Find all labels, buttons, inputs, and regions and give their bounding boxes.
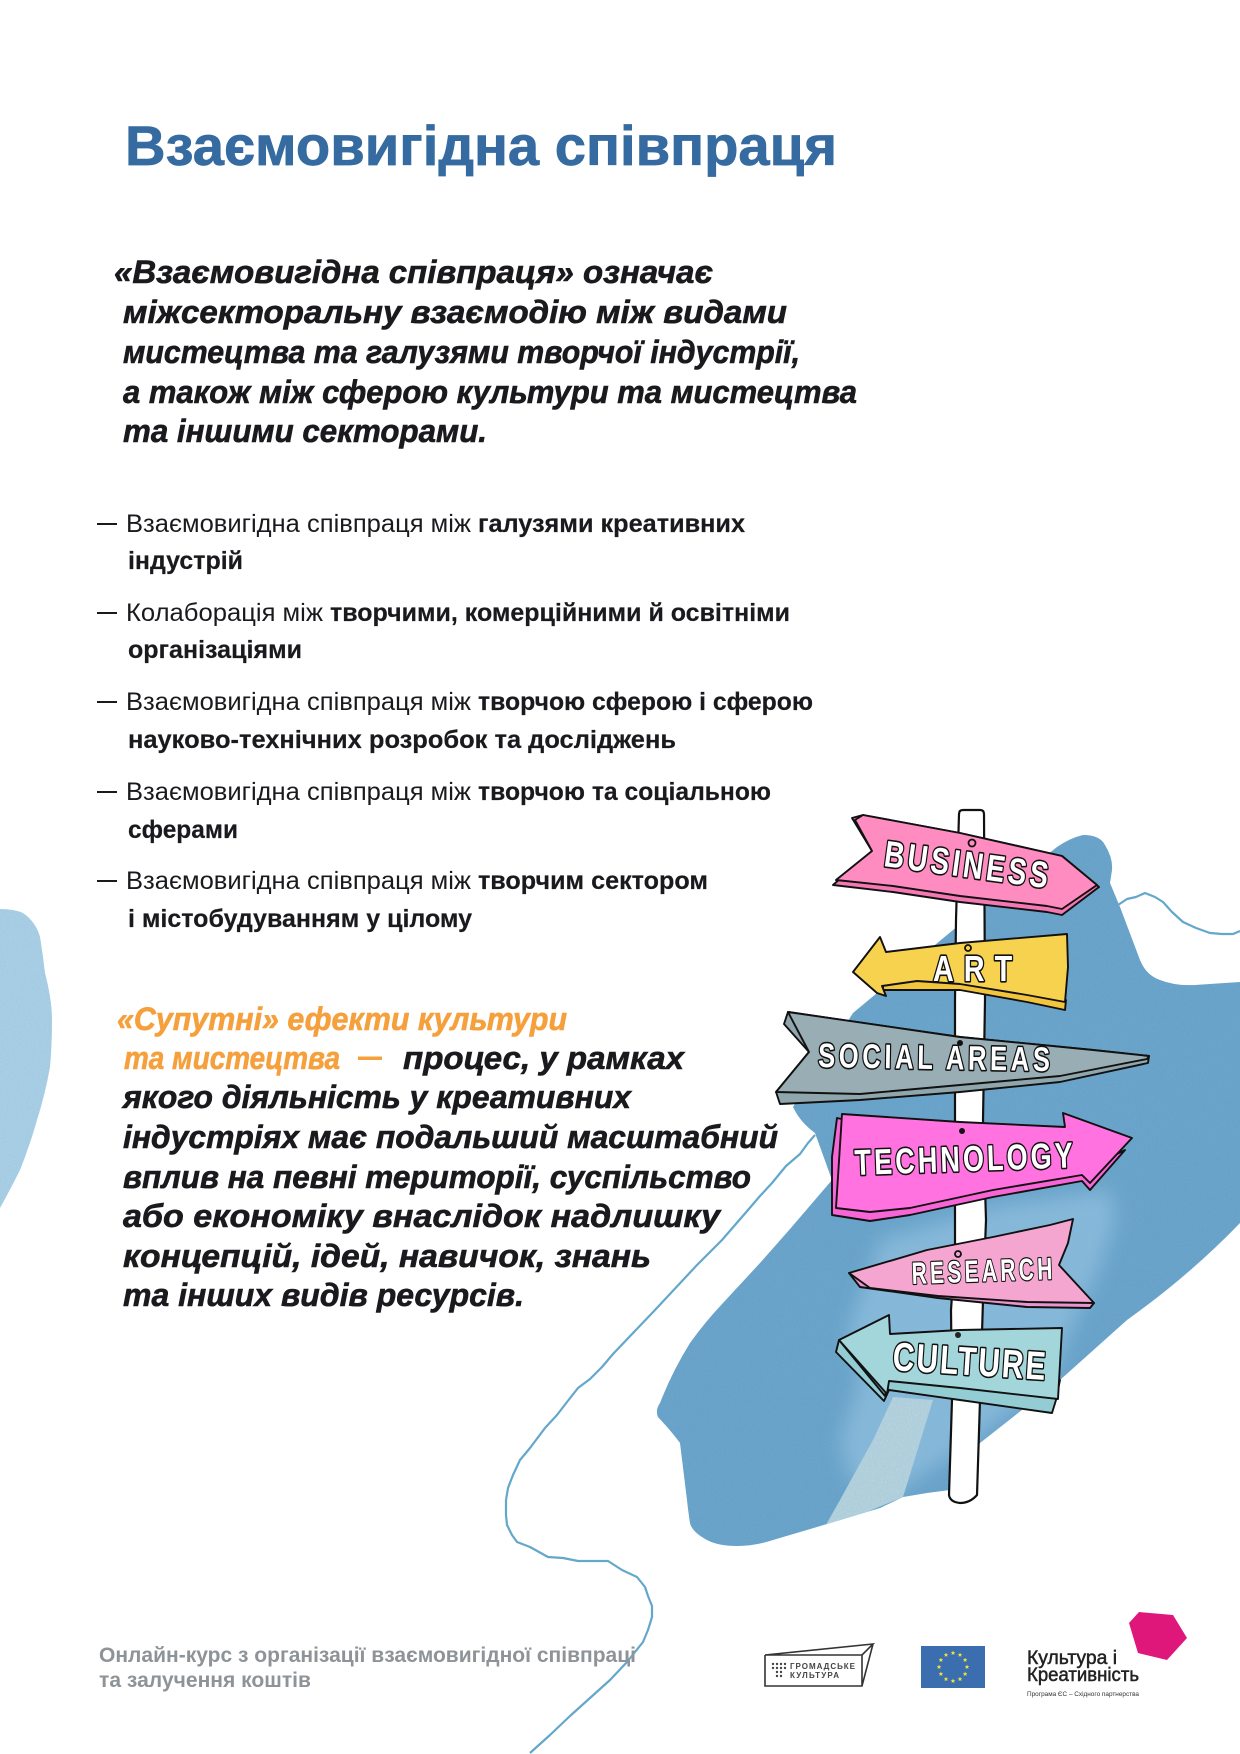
sign: art (853, 934, 1068, 1010)
logo: Culture and Creativity (1027, 1612, 1187, 1698)
list item 5: творчим сектором (478, 867, 708, 895)
spillover effects paragraph: індустріях має подальший масштабний (123, 1119, 778, 1155)
logo: Hromadske Kultura (765, 1644, 873, 1686)
spillover effects paragraph: та інших видів ресурсів. (123, 1277, 524, 1313)
spillover effects paragraph: «Супутні» ефекти культури (117, 1001, 567, 1037)
logo: Hromadske Kultura: КУЛЬТУРА (790, 1671, 839, 1680)
list item 1: Взаємовигідна співпраця між (126, 510, 471, 538)
sign: social areas: SOCIAL AREAS (818, 1038, 1050, 1079)
list item 4: творчою та соціальною (478, 778, 771, 806)
sign: research: RESEARCH (911, 1251, 1053, 1291)
intro paragraph: «Взаємовигідна співпраця» означає (114, 254, 713, 290)
list item 5 (97, 867, 708, 933)
logo: Culture and Creativity: Креативність (1027, 1665, 1139, 1686)
logo: Culture and Creativity: Культура і (1027, 1648, 1117, 1669)
intro paragraph: а також між сферою культури та мистецтва (123, 374, 857, 410)
list item 1: індустрій (128, 547, 243, 575)
list item 3 (97, 688, 813, 754)
list item 1 (97, 510, 745, 575)
logo: EU flag (921, 1646, 985, 1688)
post (949, 810, 986, 1503)
sign: culture: CULTURE (891, 1335, 1047, 1389)
list item 4 (97, 778, 771, 844)
intro paragraph: мистецтва та галузями творчої індустрії, (123, 334, 800, 370)
sign: research (849, 1219, 1094, 1308)
background watercolor blob: right (650, 830, 1240, 1550)
intro paragraph (114, 254, 857, 449)
sign: social areas (776, 1012, 1149, 1104)
list item 4: сферами (128, 816, 238, 844)
footer course label: та залучення коштів (99, 1669, 311, 1692)
list item 1: галузями креативних (478, 510, 745, 538)
spillover effects paragraph: концепцій, ідей, навичок, знань (123, 1238, 651, 1274)
sign: technology (832, 1113, 1132, 1221)
list of collaboration types (97, 510, 813, 933)
footer course label: Онлайн-курс з організації взаємовигідної співпраці (99, 1644, 636, 1667)
intro paragraph: міжсекторальну взаємодію між видами (123, 294, 787, 330)
title: Взаємовигідна співпраця (125, 114, 837, 177)
list item 2 (97, 599, 790, 664)
sign: technology: TECHNOLOGY (854, 1135, 1073, 1183)
list item 4: Взаємовигідна співпраця між (126, 778, 471, 806)
spillover effects paragraph: та мистецтва (124, 1040, 340, 1076)
footer course label (99, 1644, 636, 1692)
intro paragraph: та іншими секторами. (123, 413, 487, 449)
signpost illustration (776, 810, 1149, 1503)
list item 5: і містобудуванням у цілому (128, 905, 472, 933)
logo: Hromadske Kultura: ГРОМАДСЬКЕ (790, 1662, 856, 1671)
sign: art: ART (933, 948, 1012, 989)
list item 2: Колаборація між (126, 599, 323, 627)
spillover effects paragraph: вплив на певні території, суспільство (123, 1159, 751, 1195)
list item 3: творчою сферою і сферою (478, 688, 813, 716)
spillover effects paragraph: процес, у рамках (403, 1040, 685, 1076)
decorative thin line: flowing contour left (506, 1135, 815, 1753)
spillover effects paragraph: якого діяльність у креативних (121, 1079, 632, 1115)
sign: culture (836, 1315, 1062, 1413)
logo: Culture and Creativity: Програма ЄС – Східного партнерства (1027, 1690, 1139, 1698)
decorative thin line: contour right (1118, 893, 1240, 934)
list item 5: Взаємовигідна співпраця між (126, 867, 471, 895)
spillover effects paragraph: або економіку внаслідок надлишку (123, 1198, 722, 1234)
spillover effects paragraph (117, 1001, 778, 1313)
background watercolor blob: left (0, 909, 52, 1208)
list item 3: науково-технічних розробок та досліджень (128, 726, 676, 754)
list item 3: Взаємовигідна співпраця між (126, 688, 471, 716)
list item 2: організаціями (128, 636, 302, 664)
list item 2: творчими, комерційними й освітніми (330, 599, 790, 627)
sign: business: BUSINESS (882, 832, 1051, 896)
sign: business (833, 815, 1099, 915)
